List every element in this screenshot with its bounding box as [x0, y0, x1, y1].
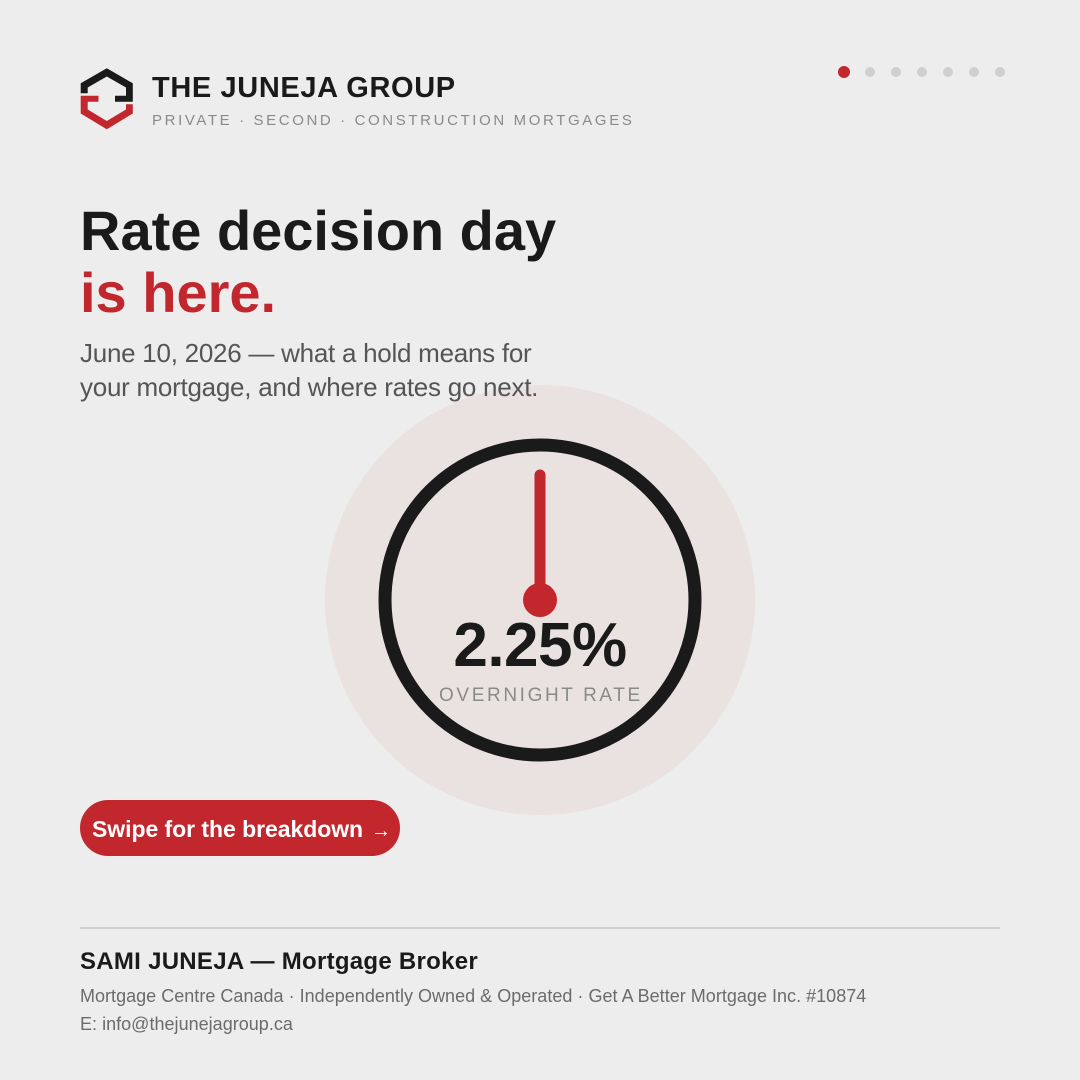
company details: Mortgage Centre Canada · Independently Owned & Operated · Get A Better Mortgage Inc. #10874 [80, 986, 866, 1006]
button: swipe call to action: Swipe for the breakdown [92, 816, 363, 842]
button: swipe call to action: → [371, 820, 391, 842]
brand tagline: PRIVATE · SECOND · CONSTRUCTION MORTGAGES [152, 112, 634, 129]
brand name: THE JUNEJA GROUP [152, 72, 456, 104]
rate value: 2.25% [453, 611, 627, 680]
headline [80, 199, 556, 324]
button: swipe call to action [80, 800, 400, 856]
headline: is here. [80, 261, 276, 324]
subheading: June 10, 2026 — what a hold means for [80, 338, 531, 368]
headline: Rate decision day [80, 199, 556, 262]
subheading [80, 338, 538, 402]
pagination dots [838, 66, 1005, 78]
subheading: your mortgage, and where rates go next. [80, 372, 538, 402]
broker name: SAMI JUNEJA — Mortgage Broker [80, 948, 478, 975]
background circle [325, 385, 755, 815]
company details [80, 986, 866, 1034]
gauge dial [378, 438, 702, 762]
rate label: OVERNIGHT RATE [439, 685, 643, 706]
icon: house hexagon logo [80, 68, 133, 130]
company details: E: info@thejunejagroup.ca [80, 1014, 293, 1034]
footer divider [80, 927, 1000, 929]
